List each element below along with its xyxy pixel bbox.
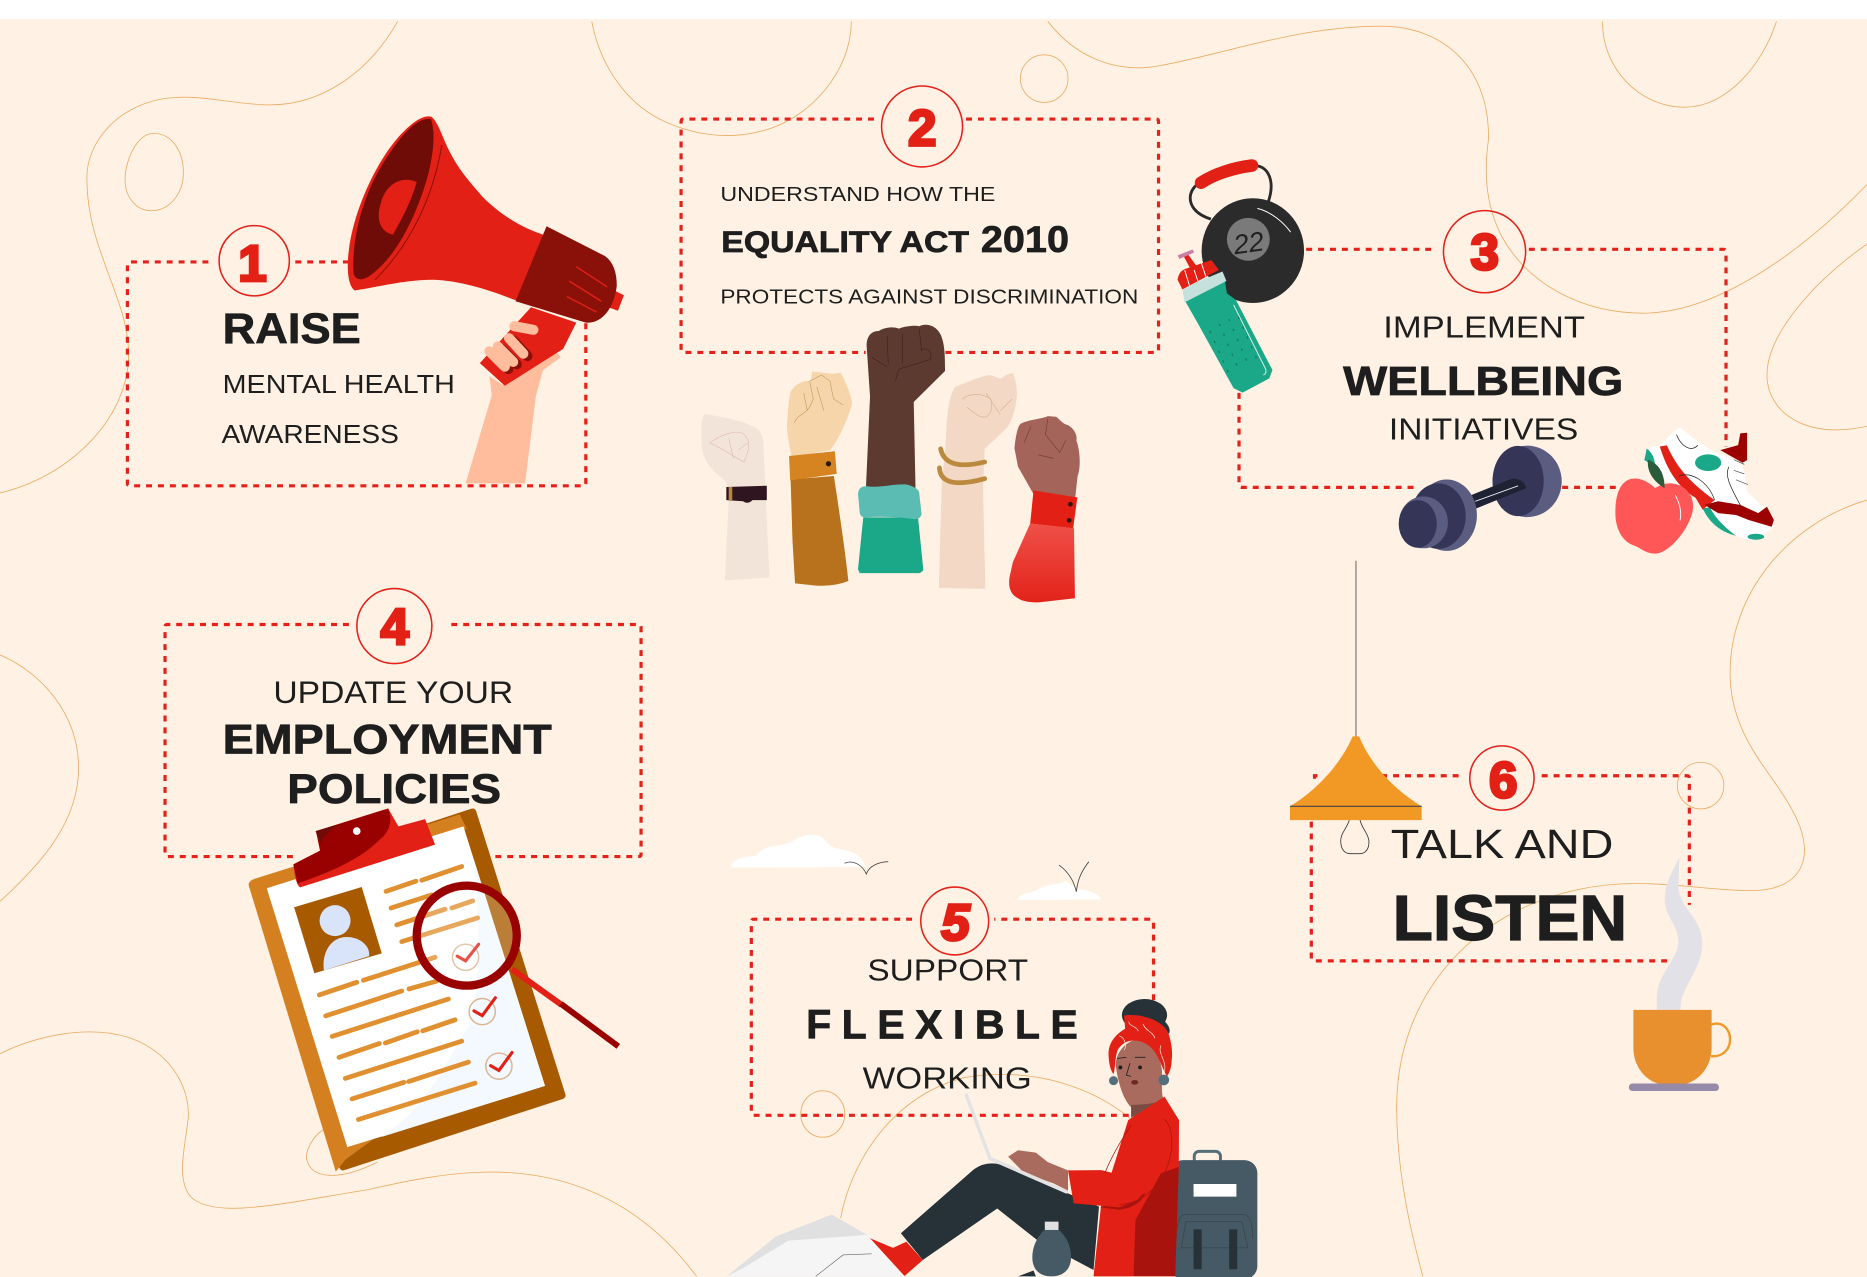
clip (293, 808, 435, 887)
text: implement: IMPLEMENT (1383, 309, 1585, 344)
number badge 6: 6 (1489, 751, 1517, 808)
dashed frame 3 (1239, 249, 1726, 487)
panel 1: raise mental health awareness (127, 116, 624, 486)
panel 2: understand the equality act (681, 86, 1159, 602)
icon: apple (1615, 460, 1693, 554)
icon: sports shoe (1644, 427, 1774, 540)
text: initiatives: INITIATIVES (1389, 411, 1578, 446)
number badge 5: 5 (941, 894, 971, 951)
text: support: SUPPORT (867, 953, 1028, 988)
icon: coffee cup (1629, 857, 1730, 1091)
clouds and birds (731, 835, 1101, 900)
heading: employment policies: POLICIES (287, 765, 501, 812)
illustration: woman working on laptop (726, 999, 1257, 1277)
number badge 3 (1443, 211, 1526, 293)
dashed frame 4 (165, 625, 641, 857)
number badge 5 (921, 887, 989, 955)
orange text lines (319, 866, 478, 1119)
legs (901, 1163, 1099, 1270)
panel 4: update your employment policies (165, 589, 641, 1172)
dashed frame 6 (1311, 776, 1689, 961)
number badge 3: 3 (1471, 224, 1499, 281)
illustration: raised fists (701, 325, 1080, 602)
number badge 1: 1 (238, 235, 267, 292)
flask (1018, 1222, 1071, 1276)
dashed frame 1 (127, 262, 586, 486)
backpack (1170, 1151, 1257, 1277)
number badge 2: 2 (908, 99, 936, 156)
text: update your: UPDATE YOUR (273, 674, 513, 710)
id photo (294, 887, 382, 973)
fist: pale with bracelet (701, 414, 770, 580)
text: talk and: TALK AND (1391, 821, 1613, 867)
head with turban (1109, 999, 1172, 1125)
dashed frame 5 (751, 919, 1154, 1115)
text: mental health awareness: MENTAL HEALTH (223, 369, 455, 399)
heading: flexible: FLEXIBLE (806, 1001, 1078, 1047)
icon: kettlebell: 22 (1230, 225, 1266, 260)
icon: hanging lamp (1290, 561, 1422, 854)
heading: equality act 2010: 2010 (981, 219, 1069, 260)
arm (1008, 1150, 1068, 1191)
rocks (726, 1214, 903, 1277)
laptop (966, 1095, 1066, 1192)
magnifying glass (417, 886, 618, 1046)
fist: brown with red sleeve (1009, 416, 1080, 602)
heading: employment policies: EMPLOYMENT (223, 716, 552, 763)
shirt (1068, 1097, 1179, 1276)
icon: megaphone in hand (348, 116, 624, 483)
text: understand how the: UNDERSTAND HOW THE (720, 184, 995, 206)
check marks (452, 944, 512, 1079)
text: working: WORKING (863, 1060, 1032, 1095)
fist: dark with teal sleeve (858, 325, 945, 573)
dashed frame 2 (681, 119, 1159, 352)
heading: employment policies (223, 716, 552, 812)
number badge 4: 4 (380, 598, 409, 655)
red shoe (870, 1238, 923, 1276)
icon: water bottle (1178, 249, 1272, 393)
number badge 1 (219, 226, 289, 296)
icon: dumbbell (1399, 446, 1562, 551)
heading: equality act 2010 (721, 219, 1069, 260)
text: mental health awareness: AWARENESS (221, 419, 399, 449)
fist: light with gold bangles (939, 373, 1017, 589)
heading: equality act 2010: EQUALITY ACT (721, 226, 969, 259)
text: protects against discrimination: PROTECTS AGAINST DISCRIMINATION (720, 287, 1138, 309)
text: mental health awareness (221, 369, 455, 449)
heading: listen: LISTEN (1393, 882, 1627, 954)
fist: tan with orange sleeve (787, 371, 852, 586)
heading: raise: RAISE (223, 305, 361, 353)
number badge 2 (882, 86, 963, 167)
number badge 6 (1470, 746, 1534, 810)
icon: kettlebell (1190, 166, 1304, 303)
heading: wellbeing: WELLBEING (1343, 358, 1623, 404)
panel 6: talk and listen (1290, 561, 1730, 1091)
icon: clipboard with checklist (249, 808, 618, 1172)
panel 5: support flexible working (726, 835, 1257, 1277)
panel 3: implement wellbeing initiatives (1178, 166, 1774, 554)
number badge 4 (357, 589, 432, 664)
